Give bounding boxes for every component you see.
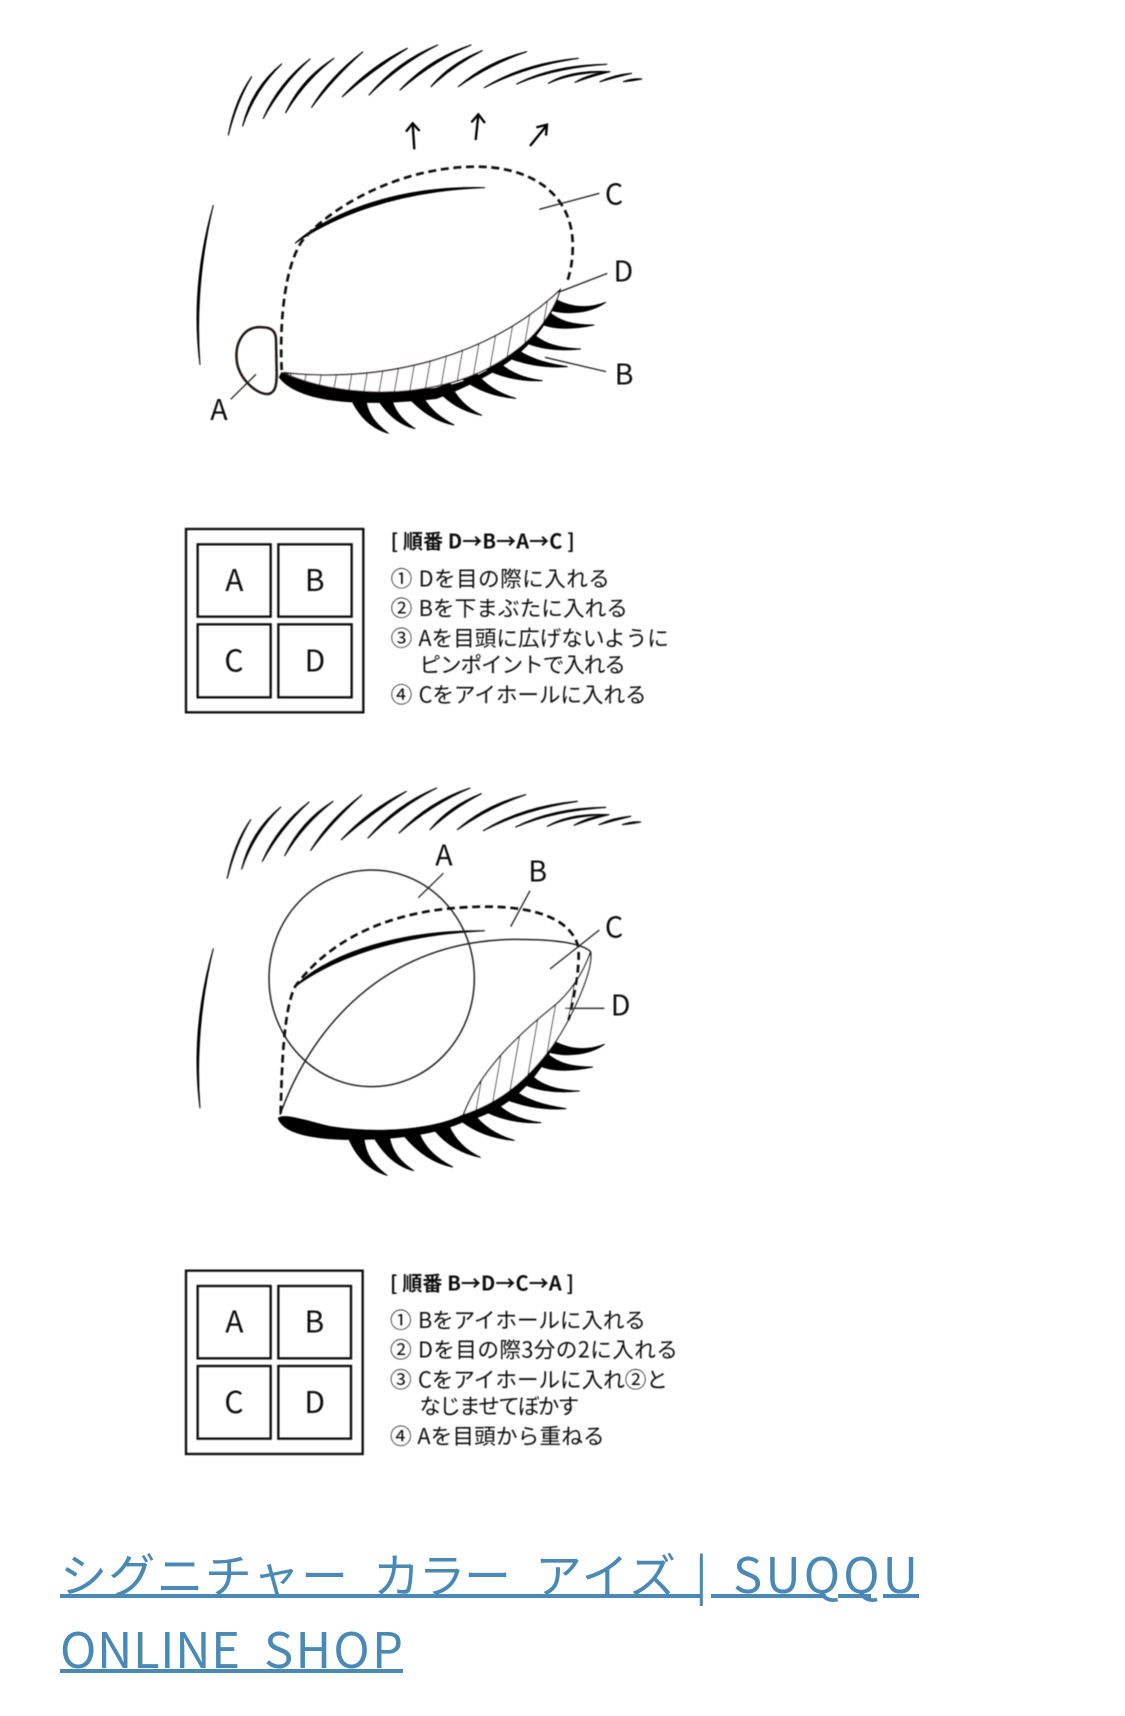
steps list: Bをアイホールに入れる <box>418 1304 646 1335</box>
steps list: Cをアイホールに入れ②と <box>418 1364 668 1395</box>
area D hatched outer lid <box>463 952 591 1115</box>
labels A B C D <box>210 172 633 429</box>
palette letters: C <box>224 1378 244 1422</box>
steps list: ピンポイントで入れる <box>419 649 626 680</box>
area B dashed eye-hole outline <box>281 907 579 1113</box>
labels A B C D: A <box>435 834 453 875</box>
lash line <box>279 300 557 402</box>
link text line 2 <box>60 1612 403 1683</box>
steps list: Bを下まぶたに入れる <box>419 592 628 623</box>
steps list: ④ <box>391 679 412 710</box>
link text line 1 <box>60 1537 918 1608</box>
labels A B C D: C <box>605 172 623 213</box>
palette grid <box>186 529 363 712</box>
eyelashes <box>349 300 606 433</box>
panel: eye diagram 1 <box>197 45 642 433</box>
palette letters <box>224 556 325 680</box>
area A circle <box>269 870 474 1087</box>
area A inner corner shape <box>236 327 277 394</box>
temple line <box>197 948 213 1108</box>
palette letters: C <box>224 636 244 680</box>
link underline 1 <box>60 1594 919 1598</box>
lash line <box>278 1045 553 1139</box>
temple line <box>197 205 213 365</box>
eyebrow hairs <box>227 788 641 878</box>
steps list: ② <box>390 1334 412 1365</box>
steps list: Aを目頭から重ねる <box>417 1420 605 1451</box>
steps list: Dを目の際3分の2に入れる <box>418 1334 678 1365</box>
link: product page <box>60 1537 919 1683</box>
steps list: ③ <box>391 622 412 653</box>
leader lines <box>231 193 607 399</box>
palette letters: A <box>225 556 244 600</box>
palette letters: D <box>305 636 325 680</box>
labels A B C D: B <box>528 850 547 891</box>
steps list: ② <box>391 592 412 623</box>
palette letters <box>224 1298 325 1422</box>
order heading: [ 順番 D→B→A→C ] <box>391 526 575 555</box>
eyelashes <box>348 1042 604 1175</box>
upward arrows <box>406 114 547 149</box>
area C lens outline <box>280 939 591 1115</box>
labels A B C D: D <box>611 983 631 1024</box>
link underline 2 <box>60 1669 403 1673</box>
palette letters: A <box>225 1298 244 1342</box>
order heading: [ 順番 B→D→C→A ] <box>390 1267 574 1296</box>
steps list <box>391 562 669 710</box>
labels A B C D: D <box>613 250 633 291</box>
palette letters: B <box>305 556 325 600</box>
steps list: なじませてぼかす <box>419 1390 579 1421</box>
link text line 1: アイズ <box>535 1538 676 1607</box>
link text line 1: | <box>695 1538 708 1607</box>
eyelid crease <box>295 188 485 243</box>
panel: palette legend 2 <box>186 1267 678 1454</box>
link text line 1: シグニチャー <box>60 1538 348 1607</box>
area B hatched under-eye <box>283 290 560 392</box>
panel: eye diagram 2 <box>197 788 641 1175</box>
link text line 2: ONLINE <box>60 1612 240 1683</box>
palette grid <box>186 1271 363 1454</box>
steps list: ① <box>390 1304 412 1335</box>
palette letters: B <box>304 1298 324 1342</box>
link text line 2: SHOP <box>264 1612 403 1683</box>
labels A B C D <box>435 834 631 1024</box>
area C dashed eye-hole outline <box>281 167 573 370</box>
link text line 1: カラー <box>373 1538 511 1607</box>
labels A B C D: B <box>615 352 633 393</box>
steps list: ③ <box>390 1364 412 1395</box>
steps list: Cをアイホールに入れる <box>419 679 647 710</box>
steps list <box>390 1304 678 1451</box>
labels A B C D: C <box>605 906 623 947</box>
steps list: Dを目の際に入れる <box>419 562 610 593</box>
palette letters: D <box>304 1378 325 1422</box>
steps list: Aを目頭に広げないように <box>418 622 669 653</box>
steps list: ① <box>391 562 412 593</box>
labels A B C D: A <box>210 388 228 429</box>
panel: palette legend 1 <box>186 526 669 712</box>
eyelid crease <box>295 931 485 987</box>
link text line 1: SUQQU <box>733 1537 918 1608</box>
steps list: ④ <box>390 1420 412 1451</box>
leader lines <box>418 873 604 1008</box>
eyebrow hairs <box>228 45 642 135</box>
